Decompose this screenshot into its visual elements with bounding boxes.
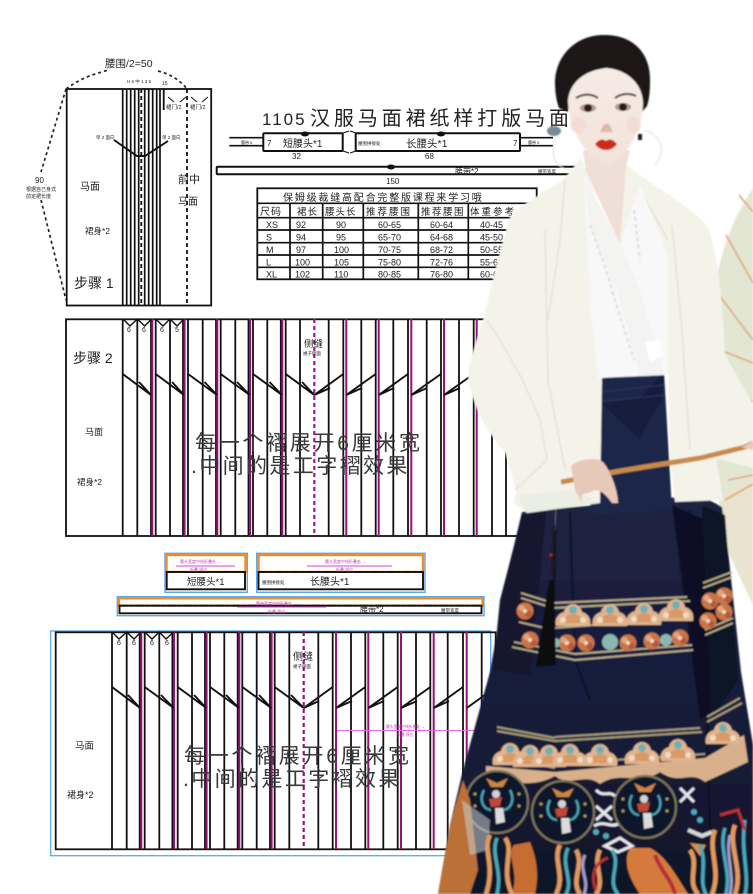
panel: size table: 推荐腰围 xyxy=(421,206,465,218)
panel: step 3 pattern: 腰头宽度中线折叠处 → xyxy=(386,724,425,729)
panel: size table: S xyxy=(266,232,272,242)
panel: size table: 55-60 xyxy=(480,258,503,268)
panel: step 2 pattern: 5 xyxy=(175,327,179,334)
blouse xyxy=(584,175,668,378)
face xyxy=(568,68,643,164)
panel: waistband pieces: 腰围拼接处 xyxy=(358,140,381,147)
panel: step 1 pattern: 根据自己身式 xyxy=(26,186,56,193)
panel: size table: 裙长 xyxy=(297,206,318,218)
panel: step 3 pattern: 裙身*2 xyxy=(67,789,94,800)
panel: step 2 pattern: 裙身*2 xyxy=(77,477,102,487)
panel: step 2 pattern: 裙子侧面 xyxy=(303,350,321,357)
panel: size table: 60-65 xyxy=(378,220,401,230)
panel: step 2 pattern: .中间的是工字褶效果 xyxy=(191,455,410,478)
panel: size table: XL xyxy=(266,270,277,280)
panel: waistband pieces: 150 xyxy=(386,177,400,186)
panel: size table: 76-80 xyxy=(430,270,453,280)
panel: size table: 110 xyxy=(334,270,348,280)
hair xyxy=(555,35,650,112)
panel: step 3 pattern: .中间的是工字褶效果 xyxy=(183,768,402,791)
panel: size table: 68-72 xyxy=(430,245,453,255)
panel: step 3 pattern: 马面 xyxy=(75,741,94,752)
panel: size table: 保姆级裁缝高配合完整版课程来学习哦 xyxy=(283,191,484,204)
panel: waistband pieces: 32 xyxy=(292,152,301,161)
panel: size table: 推荐腰围 xyxy=(366,206,412,218)
panel: step 1 pattern: 前定裙长度 xyxy=(26,193,51,200)
facial features xyxy=(570,94,641,150)
panel: waistband pieces xyxy=(217,131,577,186)
panel: size table: M xyxy=(266,245,274,255)
panel: step 2 pattern: 6 xyxy=(142,327,146,334)
icon: earrings xyxy=(547,126,661,170)
panel: size table: 70-75 xyxy=(378,245,401,255)
panel: size table: 60-65 xyxy=(480,270,503,280)
panel: step 2 pattern: 6 xyxy=(160,327,164,334)
panel: step 1 pattern: 腰围/2=50 xyxy=(105,58,153,70)
hem waves xyxy=(438,780,478,894)
panel: step 1 pattern: 单 2 面向 xyxy=(162,134,181,141)
panel: waistband pieces: 腰带 5 xyxy=(528,139,540,145)
panel: size table: 72-76 xyxy=(430,258,453,268)
panel: size table: 50-55 xyxy=(480,245,503,255)
panel: short waistband marked xyxy=(165,553,247,592)
panel: long belt marked xyxy=(117,597,484,616)
panel: step 1 pattern: 裙身*2 xyxy=(85,226,110,236)
panel: step 1 pattern: 裙门/2 xyxy=(190,103,206,111)
panel: step 1 pattern: H 6 中 1 3 6 xyxy=(127,78,152,85)
panel: long belt marked: 腰带*2 xyxy=(360,605,384,614)
panel: short waistband marked: 腰头宽度中线折叠处 → xyxy=(180,558,221,564)
panel: waistband pieces: 7 xyxy=(267,139,272,148)
title: 1105 xyxy=(262,110,307,129)
panel: size table: 体重参考 xyxy=(470,206,516,218)
panel: step 3 pattern: 裙子侧面 xyxy=(293,663,311,670)
panel: size table: 100 xyxy=(295,258,310,268)
title: 汉服马面裙纸样打版马面 xyxy=(310,107,573,130)
photo: model in hanfu with umbrella xyxy=(438,35,753,894)
panel: step 3 pattern: 侧缝 xyxy=(293,650,313,663)
panel: size table: XS xyxy=(266,220,278,230)
panel: step 2 pattern: 侧缝 xyxy=(304,338,324,350)
panel: step 2 pattern: 每一个褶展开6厘米宽 xyxy=(195,432,423,455)
panel: step 2 pattern: 马面 xyxy=(85,427,103,437)
panel: waistband pieces: 腰带宽度 xyxy=(538,168,556,175)
panel: size table: 64-68 xyxy=(430,232,453,242)
panel: step 3 pattern: 6 xyxy=(132,640,136,647)
panel: step 1 pattern: 裙门/2 xyxy=(166,103,182,111)
icon: tassel xyxy=(536,480,557,667)
panel: step 1 pattern: 90 xyxy=(35,176,44,185)
panel: waistband pieces: 腰带 5 xyxy=(241,139,253,145)
panel: size table xyxy=(257,188,537,280)
panel: size table: 60-64 xyxy=(430,220,453,230)
panel: step 3 pattern: 折叠 线位 xyxy=(397,732,413,737)
panel: long waistband marked xyxy=(257,553,425,592)
panel: step 1 pattern xyxy=(26,58,211,306)
panel: step 1 pattern: 步骤 1 xyxy=(74,275,114,291)
panel: step 1 pattern: 单 2 面向 xyxy=(96,134,115,141)
panel: size table: 65-70 xyxy=(378,232,401,242)
cardigan xyxy=(468,158,753,513)
panel: long belt marked: 腰带宽度 xyxy=(441,607,459,614)
panel: waistband pieces: 68 xyxy=(425,152,434,161)
panel: step 2 pattern: 步骤 2 xyxy=(73,350,113,366)
icon: paper umbrella xyxy=(712,188,753,605)
panel: step 1 pattern: 马面 xyxy=(80,181,100,193)
panel: size table: 105 xyxy=(334,258,349,268)
medallions xyxy=(614,776,676,838)
panel: size table: 100 xyxy=(334,245,349,255)
panel: waistband pieces: 7 xyxy=(513,139,518,148)
panel: size table: L xyxy=(266,258,271,268)
hand and fan stick xyxy=(561,440,753,503)
panel: size table: 92 xyxy=(296,220,306,230)
neck xyxy=(583,150,630,244)
panel: long belt marked: 折叠 线位 xyxy=(268,608,285,614)
panel: step 3 pattern: 6 xyxy=(117,640,121,647)
panel: size table: 94 xyxy=(296,232,306,242)
panel: long belt marked: 腰带宽度中线折叠处 → xyxy=(256,600,297,606)
panel: waistband pieces: 长腰头*1 xyxy=(406,138,448,150)
panel: long waistband marked: 腰围拼接处 xyxy=(262,579,285,586)
band 2 xyxy=(497,698,742,768)
panel: long waistband marked: 折叠 线位 xyxy=(336,566,353,572)
panel: step 3 pattern xyxy=(51,631,496,856)
panel: long waistband marked: 腰头宽度中线折叠处 → xyxy=(325,558,366,564)
panel: waistband pieces: 腰带*2 xyxy=(455,167,479,176)
panel: step 1 pattern: 前中 xyxy=(178,172,200,186)
panel: step 2 pattern: 6 xyxy=(127,327,131,334)
panel: size table: 90 xyxy=(336,220,346,230)
panel: step 3 pattern: 6 xyxy=(165,640,169,647)
panel: step 1 pattern: 马面 xyxy=(178,196,198,208)
panel: long waistband marked: 长腰头*1 xyxy=(310,576,350,588)
panel: size table: 40-45 xyxy=(480,220,503,230)
panel: step 3 pattern: 6 xyxy=(150,640,154,647)
panel: size table: 102 xyxy=(295,270,310,280)
panel: waistband pieces: 短腰头*1 xyxy=(283,137,323,150)
panel: size table: 80-85 xyxy=(378,270,401,280)
panel: step 1 pattern: 15 xyxy=(162,81,168,87)
panel: step 3 pattern: 每一个褶展开6厘米宽 xyxy=(184,745,412,768)
panel: size table: 腰头长 xyxy=(325,206,357,218)
band 1 xyxy=(512,572,733,660)
panel: size table: 75-80 xyxy=(378,258,401,268)
panel: step 2 pattern xyxy=(66,319,526,536)
panel: short waistband marked: 短腰头*1 xyxy=(187,576,224,588)
panel: size table: 45-50 xyxy=(480,232,503,242)
panel: size table: 尺码 xyxy=(260,206,282,218)
panel: size table: 97 xyxy=(296,245,306,255)
panel: size table: 95 xyxy=(336,232,346,242)
skirt xyxy=(438,372,753,894)
panel: short waistband marked: 折叠 线位 xyxy=(190,566,207,572)
